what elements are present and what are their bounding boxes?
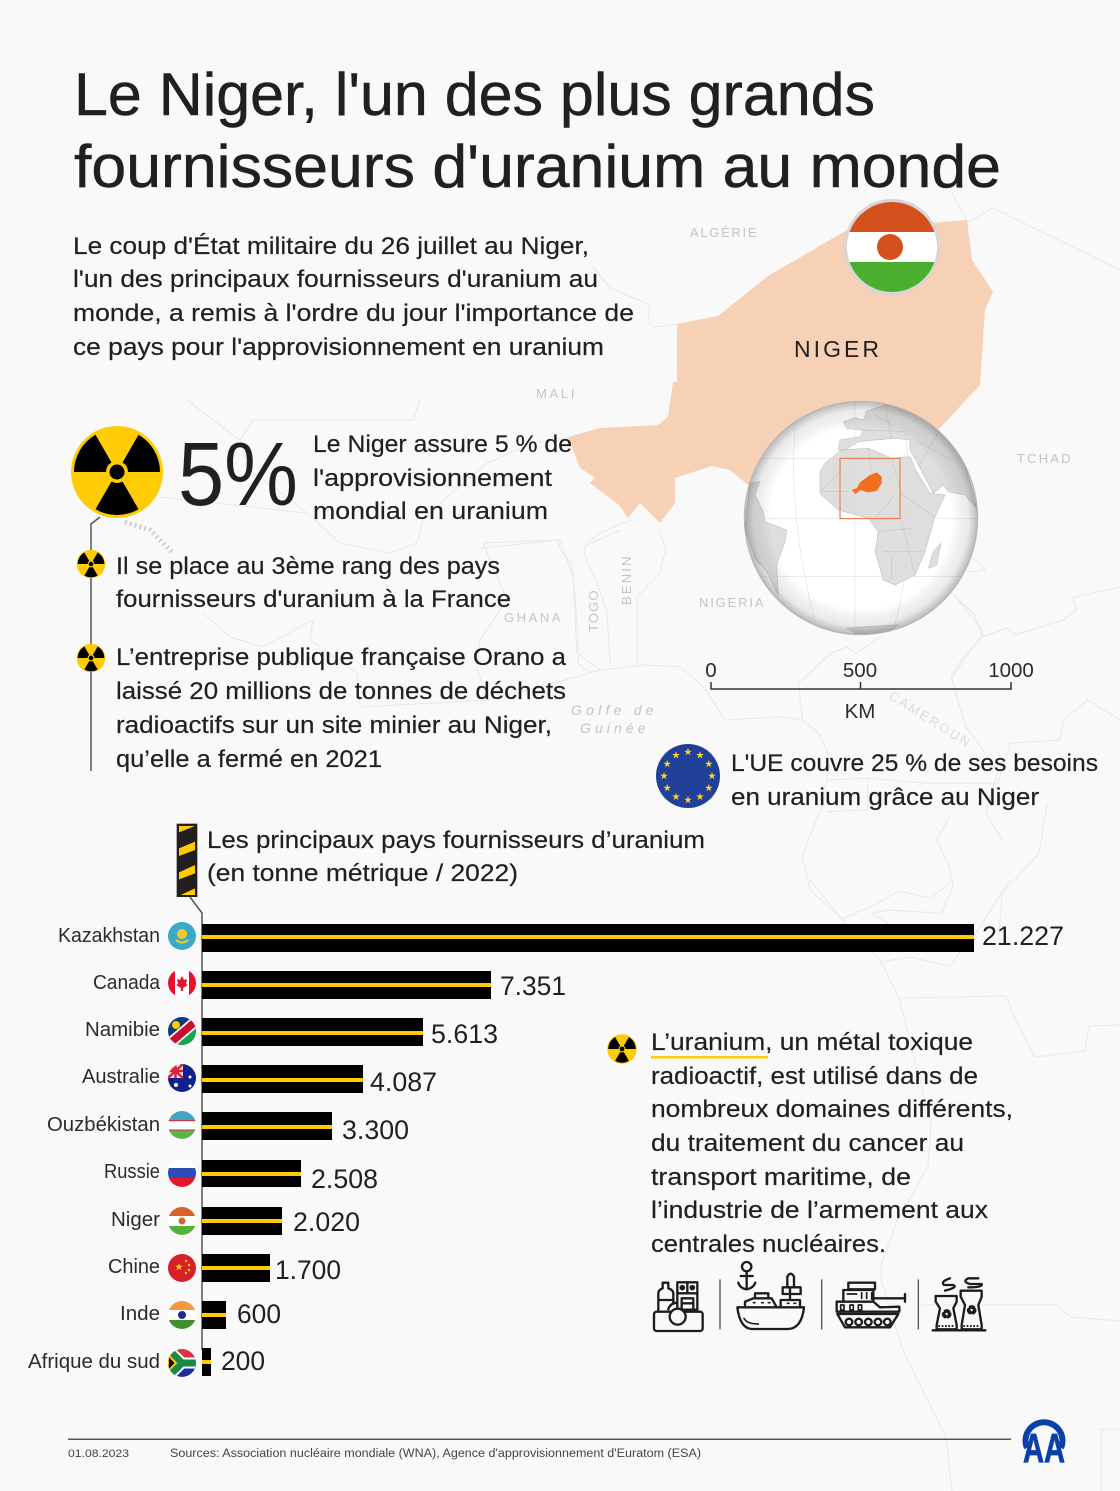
bar: Russie: 2.508 — [311, 1164, 378, 1194]
text: 3rd rank: Il se place au 3ème rang des pays — [116, 553, 500, 580]
intro text — [73, 233, 634, 361]
text: uranium uses: L’uranium, un métal toxique — [651, 1029, 973, 1056]
scale bar: 1000 — [988, 659, 1034, 682]
text: EU coverage: L'UE couvre 25 % de ses besoins — [731, 750, 1098, 777]
bar: Ouzbekistan: Ouzbékistan — [47, 1113, 160, 1136]
bar: Namibie: Namibie — [85, 1018, 160, 1041]
text: uranium uses — [651, 1029, 1013, 1258]
map: neighbouring country labels: CAMEROUN — [886, 688, 974, 750]
text: Orano — [116, 644, 566, 773]
bar: Kazakhstan: 21.227 — [982, 921, 1064, 951]
text: Niger supplies 5%: mondial en uranium — [313, 498, 548, 525]
bar: Afrique du sud: 200 — [221, 1346, 265, 1376]
flag: Kazakhstan — [168, 922, 196, 950]
flag: Australia — [168, 1064, 196, 1092]
flag: Russia — [168, 1168, 196, 1187]
text: uranium uses: nombreux domaines différents, — [651, 1096, 1013, 1123]
text: Niger supplies 5% — [313, 431, 572, 525]
globe locator — [744, 401, 978, 635]
bar: Kazakhstan: Kazakhstan — [58, 924, 160, 947]
bar: Chine: 1.700 — [275, 1255, 341, 1285]
text: Orano: laissé 20 millions de tonnes de déchets — [116, 678, 566, 705]
bar: Afrique du sud — [28, 1346, 265, 1376]
flag: Niger small — [168, 1207, 196, 1235]
text: Niger supplies 5%: l'approvisionnement — [313, 465, 552, 492]
icon: radiation bullet 2 — [77, 644, 105, 672]
icon: radiation bullet 1 — [77, 550, 105, 578]
text: uranium uses: centrales nucléaires. — [651, 1231, 886, 1258]
big number: 5%: 5% — [178, 425, 298, 525]
flag: China — [168, 1254, 196, 1282]
icon: nuclear power plant — [933, 1278, 985, 1330]
bar: Chine: Chine — [108, 1255, 160, 1278]
logo: AA — [1023, 1422, 1065, 1471]
background map borders — [125, 190, 1120, 1491]
text: uranium uses: transport maritime, de — [651, 1164, 911, 1191]
icon: large radiation symbol — [71, 426, 163, 518]
flag: Uzbekistan — [168, 1111, 196, 1140]
map: neighbouring country labels: GHANA — [504, 610, 562, 625]
icon: ship and anchor — [737, 1262, 804, 1329]
bar: Inde: 600 — [237, 1299, 281, 1329]
intro text: l'un des principaux fournisseurs d'uranium au — [73, 266, 598, 293]
text: EU coverage: en uranium grâce au Niger — [731, 784, 1039, 811]
scale bar: 500 — [843, 659, 877, 682]
chart heading: (en tonne métrique / 2022) — [207, 860, 518, 887]
title: Le Niger, l'un des plus grands — [74, 61, 875, 128]
bar: Inde — [120, 1299, 281, 1329]
footer: sources: Sources: Association nucléaire mondiale (WNA), Agence d'approvisionnement d'Euratom (ESA) — [170, 1448, 701, 1460]
globe: Niger highlight — [852, 472, 882, 494]
map: neighbouring country labels: TCHAD — [1017, 451, 1072, 466]
map: neighbouring country labels: MALI — [536, 386, 576, 401]
text: uranium uses: l’industrie de l’armement aux — [651, 1197, 988, 1224]
map: neighbouring country labels: BENIN — [619, 555, 634, 605]
map: neighbouring country labels: Guinée — [580, 720, 647, 736]
logo: AA: AA — [1023, 1425, 1065, 1471]
text: Orano: qu’elle a fermé en 2021 — [116, 746, 382, 773]
text: Orano: radioactifs sur un site minier au Niger, — [116, 712, 552, 739]
map: neighbouring country labels: Golfe de — [571, 702, 655, 718]
bar: Niger: Niger — [111, 1208, 160, 1231]
globe: locator box — [840, 458, 900, 519]
text: 3rd rank: fournisseurs d'uranium à la France — [116, 586, 511, 613]
icon: medical kit — [654, 1282, 703, 1331]
flag: South Africa — [168, 1349, 196, 1377]
bar: Kazakhstan — [58, 921, 1064, 952]
bar: Canada: 7.351 — [500, 971, 566, 1001]
text: 3rd rank — [116, 553, 511, 613]
chart axis — [190, 897, 202, 1350]
timeline connector — [91, 517, 100, 771]
scale bar — [705, 659, 1034, 723]
text: uranium uses: du traitement du cancer au — [651, 1130, 964, 1157]
bar: Australie — [82, 1065, 437, 1097]
bar: Inde: Inde — [120, 1302, 160, 1325]
map: neighbouring country labels: TOGO — [586, 589, 601, 632]
text: Niger supplies 5%: Le Niger assure 5 % de — [313, 431, 572, 458]
flag: India — [168, 1301, 196, 1329]
bar: Afrique du sud: Afrique du sud — [28, 1350, 160, 1373]
bar: Niger: 2.020 — [293, 1207, 360, 1237]
chart heading: Les principaux pays fournisseurs d’uranium — [207, 827, 705, 854]
footer: date: 01.08.2023 — [68, 1448, 129, 1460]
bar: Namibie — [85, 1018, 498, 1049]
map: neighbouring country labels: NIGERIA — [699, 595, 765, 610]
bar: Ouzbekistan: 3.300 — [342, 1115, 409, 1145]
bar: Chine — [108, 1254, 341, 1285]
icon separators — [720, 1279, 918, 1329]
intro text: Le coup d'État militaire du 26 juillet au Niger, — [73, 233, 589, 260]
icon: radiation bullet 3 — [607, 1034, 637, 1064]
text: EU coverage — [731, 750, 1098, 811]
bar: Canada — [93, 971, 566, 1001]
bar: Niger — [111, 1207, 360, 1237]
footer rule — [68, 1438, 1011, 1440]
map: neighbouring country labels — [504, 225, 1072, 750]
globe: land masses — [745, 405, 977, 634]
map: neighbouring country labels: ALGÉRIE — [690, 225, 758, 240]
map: Niger shape — [568, 220, 993, 523]
title — [74, 61, 1001, 200]
flag: Canada — [168, 971, 196, 995]
title: fournisseurs d'uranium au monde — [74, 133, 1001, 200]
icon: striped hazard post — [177, 824, 197, 897]
text: Orano: L’entreprise publique française Orano a — [116, 644, 566, 671]
bar: Namibie: 5.613 — [431, 1019, 498, 1049]
intro text: monde, a remis à l'ordre du jour l'importance de — [73, 300, 634, 327]
icon: Niger flag — [844, 199, 940, 296]
map label: NIGER: NIGER — [794, 336, 883, 362]
bar: Russie: Russie — [104, 1160, 160, 1183]
bar: Australie: Australie — [82, 1065, 160, 1088]
flag: Namibia — [168, 1017, 196, 1045]
scale bar: KM — [845, 700, 875, 723]
icon: tank — [837, 1283, 905, 1327]
bar: Ouzbekistan — [47, 1112, 409, 1145]
bar: Australie: 4.087 — [370, 1067, 437, 1097]
bar: Russie — [104, 1160, 378, 1194]
icon: EU flag — [656, 744, 720, 808]
bar: Canada: Canada — [93, 971, 161, 994]
scale bar: 0 — [705, 659, 717, 682]
bar chart — [28, 897, 1064, 1376]
intro text: ce pays pour l'approvisionnement en uranium — [73, 334, 604, 361]
chart heading — [207, 827, 705, 887]
text: uranium uses: radioactif, est utilisé dans de — [651, 1063, 978, 1090]
icons: uses of uranium — [654, 1262, 985, 1331]
country flags — [168, 922, 196, 1377]
